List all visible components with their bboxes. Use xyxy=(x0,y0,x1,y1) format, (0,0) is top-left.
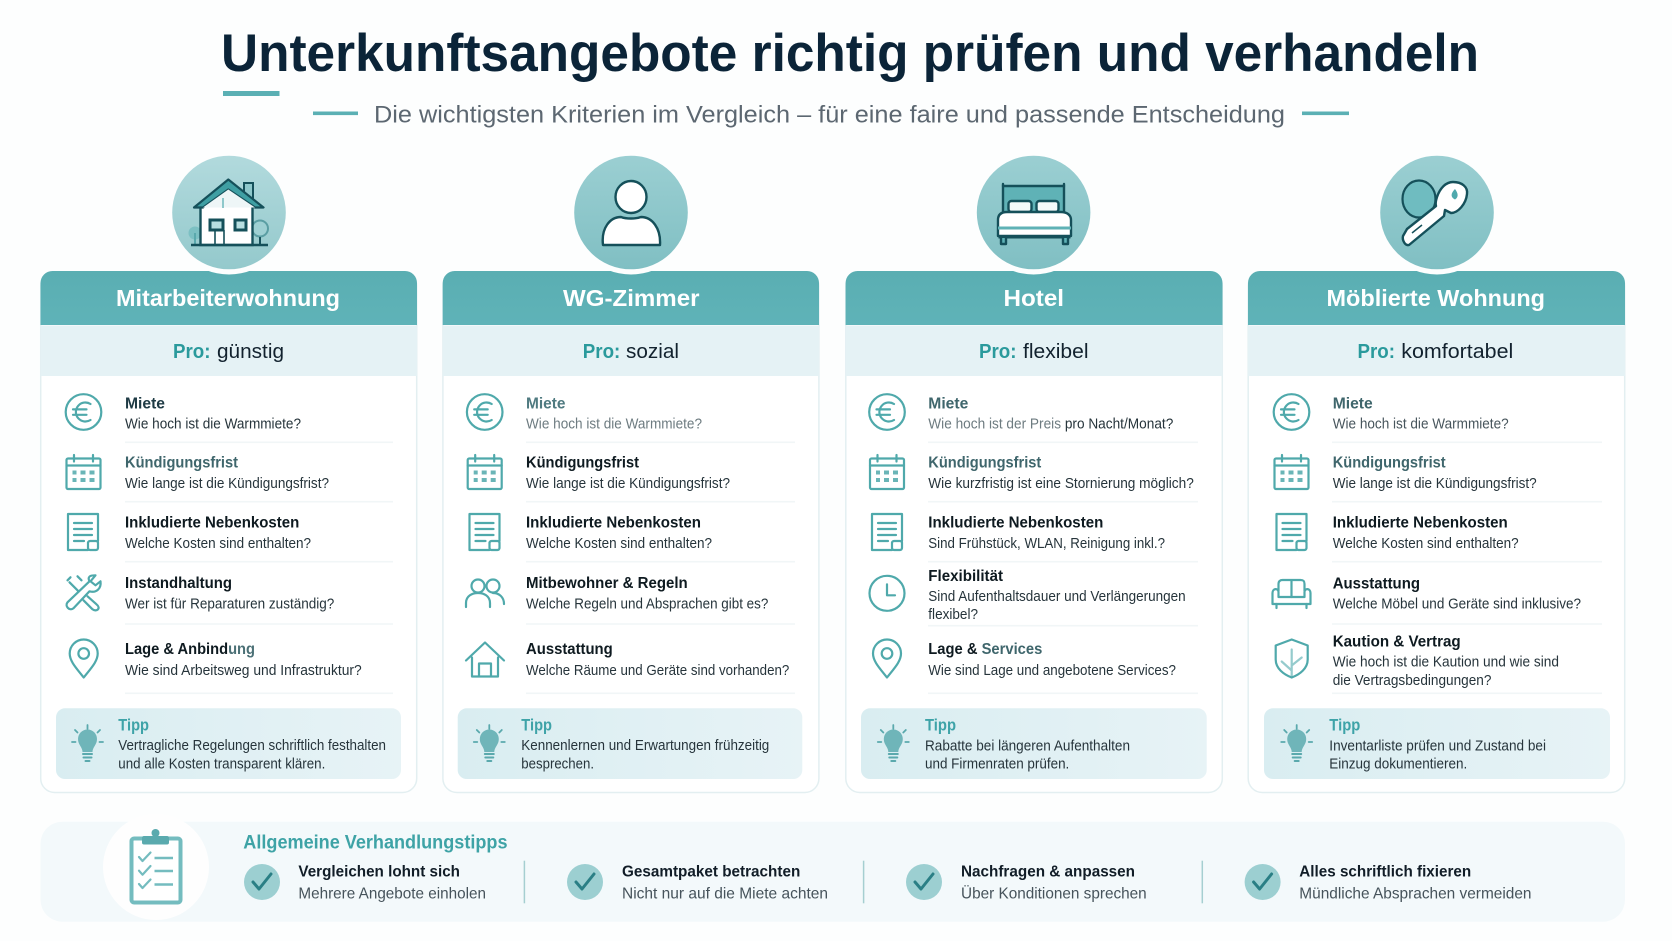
pro band xyxy=(443,326,819,376)
criterion: Kaution & Vertrag xyxy=(1276,634,1559,689)
criterion: Flexibilität: Sind Aufenthaltsdauer und Verlängerungen xyxy=(928,589,1186,605)
criterion: Miete: Wie hoch ist die Warmmiete? xyxy=(125,417,301,433)
criterion: Ausstattung xyxy=(466,641,789,679)
criterion: Instandhaltung: Instandhaltung xyxy=(125,575,232,592)
criterion: Lage & Services xyxy=(873,640,1176,679)
icon: document xyxy=(470,514,500,550)
icon: bulb xyxy=(474,725,505,761)
tip box xyxy=(458,708,802,779)
icon: shield xyxy=(1276,640,1308,678)
header: Mitarbeiterwohnung: Mitarbeiterwohnung xyxy=(116,285,340,311)
pro band: komfortabel xyxy=(1401,341,1513,363)
criterion: Inkludierte Nebenkosten: Inkludierte Nebenkosten xyxy=(526,514,701,531)
icon: bulb xyxy=(1281,725,1312,761)
icon: euro xyxy=(869,394,905,430)
criterion: Kaution & Vertrag: Wie hoch ist die Kaution und wie sind xyxy=(1333,655,1559,671)
title accent bar xyxy=(223,91,280,96)
criterion: Ausstattung: Welche Räume und Geräte sind vorhanden? xyxy=(526,663,789,679)
pro band xyxy=(40,326,417,376)
criterion: Kaution & Vertrag: die Vertragsbedingungen? xyxy=(1333,673,1491,689)
criterion: Flexibilität xyxy=(870,568,1186,623)
pro band: Pro: xyxy=(583,341,620,363)
icon: calendar xyxy=(1274,455,1308,489)
criterion: Kaution & Vertrag: Kaution & Vertrag xyxy=(1333,634,1461,651)
panel: Hotel xyxy=(846,150,1222,792)
tip box: Kennenlernen und Erwartungen frühzeitig xyxy=(521,738,769,754)
panel: general negotiation tips xyxy=(40,814,1625,922)
criterion: Inkludierte Nebenkosten: Welche Kosten sind enthalten? xyxy=(1333,536,1519,552)
icon: house badge xyxy=(167,150,291,274)
tip: Nachfragen: Über Konditionen sprechen xyxy=(961,884,1147,902)
icon: calendar xyxy=(468,455,502,489)
criterion: Inkludierte Nebenkosten xyxy=(470,514,712,552)
criterion: Kündigungsfrist: Kündigungsfrist xyxy=(125,454,239,471)
tip box: Inventarliste prüfen und Zustand bei xyxy=(1329,738,1546,754)
subtitle: Die wichtigsten Kriterien im Vergleich – für eine faire und passende Entscheidung xyxy=(374,102,1285,128)
criterion: Flexibilität: Flexibilität xyxy=(928,568,1004,585)
criterion: Inkludierte Nebenkosten xyxy=(872,514,1165,552)
icon: people xyxy=(466,580,504,607)
tip box: Tipp xyxy=(1329,717,1360,735)
tip: schriftlich: Alles schriftlich fixieren xyxy=(1299,864,1471,881)
criterion: Ausstattung: Welche Möbel und Geräte sind inklusive? xyxy=(1333,597,1581,613)
tip: Nachfragen xyxy=(906,864,1147,902)
tip box: Tipp xyxy=(925,717,956,735)
criterion: Kündigungsfrist xyxy=(66,454,329,492)
criterion: Inkludierte Nebenkosten: Sind Frühstück, WLAN, Reinigung inkl.? xyxy=(928,536,1165,552)
criterion: Lage & Anbindung: Lage & Anbindung xyxy=(125,641,255,658)
criterion: Instandhaltung xyxy=(67,575,334,613)
header: Hotel xyxy=(846,271,1222,325)
header: Mitarbeiterwohnung xyxy=(40,271,417,325)
tip box xyxy=(56,708,401,779)
criterion: Inkludierte Nebenkosten: Inkludierte Nebenkosten xyxy=(928,514,1103,531)
icon: bed badge xyxy=(972,150,1096,274)
tip box: und Firmenraten prüfen. xyxy=(925,756,1069,772)
tip box xyxy=(1264,708,1610,779)
criterion: Kündigungsfrist: Wie lange ist die Kündigungsfrist? xyxy=(526,476,730,492)
criterion: Miete xyxy=(869,394,1173,433)
tip: Gesamtpaket xyxy=(567,864,828,902)
tip: Vergleichen: Vergleichen lohnt sich xyxy=(298,864,460,881)
icon: document xyxy=(68,514,98,550)
heading: general tips: Allgemeine Verhandlungstipps xyxy=(243,831,508,853)
icon: sofa xyxy=(1272,580,1310,608)
criterion: Lage & Anbindung xyxy=(70,640,362,679)
criterion: Miete: Miete xyxy=(1333,395,1373,412)
criterion: Instandhaltung: Wer ist für Reparaturen zuständig? xyxy=(125,597,334,613)
icon: bulb xyxy=(72,725,103,761)
criterion: Miete: Miete xyxy=(526,395,566,412)
criterion: Miete: Miete xyxy=(125,395,165,412)
criterion: Miete: Miete xyxy=(928,395,968,412)
criterion: Kündigungsfrist: Wie kurzfristig ist eine Stornierung möglich? xyxy=(928,476,1194,492)
tip: Gesamtpaket: Gesamtpaket betrachten xyxy=(622,864,800,881)
criterion: Miete: Wie hoch ist der Preis pro Nacht/Monat? xyxy=(928,417,1173,433)
pro band: Pro: xyxy=(1358,341,1395,363)
criterion: Ausstattung: Ausstattung xyxy=(1333,575,1420,592)
tip box: und alle Kosten transparent klären. xyxy=(118,756,325,772)
tip: Gesamtpaket: Nicht nur auf die Miete achten xyxy=(622,885,828,902)
icon: document xyxy=(872,514,902,550)
icon: pin xyxy=(70,640,98,678)
criterion: Inkludierte Nebenkosten: Welche Kosten sind enthalten? xyxy=(526,536,712,552)
tip box xyxy=(861,708,1207,779)
criterion: Inkludierte Nebenkosten xyxy=(1276,514,1519,552)
pro band xyxy=(1248,326,1625,376)
icon: key badge xyxy=(1375,150,1499,274)
pro band: flexibel xyxy=(1023,341,1088,363)
pro band: Pro: xyxy=(979,341,1016,363)
header: Möblierte Wohnung: Möblierte Wohnung xyxy=(1326,285,1545,311)
header: WG-Zimmer: WG-Zimmer xyxy=(563,285,700,311)
criterion: Mitbewohner & Regeln: Welche Regeln und Absprachen gibt es? xyxy=(526,597,768,613)
criterion: Inkludierte Nebenkosten: Welche Kosten sind enthalten? xyxy=(125,536,311,552)
icon: euro xyxy=(467,394,502,430)
tip box: Vertragliche Regelungen schriftlich festhalten xyxy=(118,738,386,754)
tip: Vergleichen xyxy=(244,864,486,902)
criterion: Ausstattung xyxy=(1272,575,1581,613)
tip: schriftlich: Mündliche Absprachen vermeiden xyxy=(1299,885,1532,902)
criterion: Kündigungsfrist xyxy=(870,454,1194,492)
title: Unterkunftsangebote richtig prüfen und verhandeln xyxy=(221,24,1479,83)
tip box: besprechen. xyxy=(521,756,594,772)
criterion: Mitbewohner & Regeln: Mitbewohner & Regeln xyxy=(526,575,688,592)
panel: Mitarbeiterwohnung xyxy=(40,150,417,792)
criterion: Ausstattung: Ausstattung xyxy=(526,641,613,658)
panel: WG-Zimmer xyxy=(443,150,819,792)
criterion: Lage & Services: Lage & Services xyxy=(928,641,1042,658)
criterion: Kündigungsfrist xyxy=(468,454,730,492)
icon: euro xyxy=(66,394,101,430)
criterion: Kündigungsfrist: Kündigungsfrist xyxy=(526,454,640,471)
criterion: Miete: Wie hoch ist die Warmmiete? xyxy=(526,417,702,433)
criterion: Inkludierte Nebenkosten: Inkludierte Nebenkosten xyxy=(125,514,299,531)
icon: person badge xyxy=(569,150,693,274)
criterion: Miete xyxy=(66,394,301,433)
tip: Vergleichen: Mehrere Angebote einholen xyxy=(298,885,486,902)
icon: euro xyxy=(1274,394,1309,430)
criterion: Kündigungsfrist: Kündigungsfrist xyxy=(928,454,1042,471)
icon: calendar xyxy=(870,455,904,489)
icon: bulb xyxy=(878,725,909,761)
header: Hotel: Hotel xyxy=(1004,285,1064,311)
criterion: Kündigungsfrist: Wie lange ist die Kündigungsfrist? xyxy=(125,476,329,492)
pro band: sozial xyxy=(626,341,679,363)
criterion: Kündigungsfrist: Wie lange ist die Kündigungsfrist? xyxy=(1333,476,1537,492)
tip: Nachfragen: Nachfragen & anpassen xyxy=(961,864,1135,881)
tip: schriftlich xyxy=(1245,864,1532,902)
criterion: Mitbewohner & Regeln xyxy=(466,575,768,613)
icon: house outline xyxy=(466,642,504,676)
criterion: Flexibilität: flexibel? xyxy=(928,607,978,623)
tip box: Einzug dokumentieren. xyxy=(1329,756,1467,772)
header: Möblierte Wohnung xyxy=(1248,271,1625,325)
criterion: Lage & Anbindung: Wie sind Arbeitsweg und Infrastruktur? xyxy=(125,663,362,679)
panel: Möblierte Wohnung xyxy=(1248,150,1625,792)
icon: clock xyxy=(870,576,904,611)
icon: document xyxy=(1276,514,1306,550)
criterion: Lage & Services: Wie sind Lage und angebotene Services? xyxy=(928,663,1176,679)
header: WG-Zimmer xyxy=(443,271,819,325)
icon: pin xyxy=(873,640,901,678)
tip box: Tipp xyxy=(118,717,149,735)
criterion: Inkludierte Nebenkosten: Inkludierte Nebenkosten xyxy=(1333,514,1508,531)
tip box: Tipp xyxy=(521,717,552,735)
criterion: Kündigungsfrist: Kündigungsfrist xyxy=(1333,454,1446,471)
criterion: Inkludierte Nebenkosten xyxy=(68,514,311,552)
pro band: günstig xyxy=(217,341,284,363)
criterion: Miete xyxy=(467,394,702,433)
criterion: Miete xyxy=(1274,394,1509,433)
pro band: Pro: xyxy=(173,341,210,363)
pro band xyxy=(846,326,1222,376)
icon: clipboard xyxy=(103,814,209,920)
icon: calendar xyxy=(66,455,100,489)
tip box: Rabatte bei längeren Aufenthalten xyxy=(925,738,1130,754)
criterion: Miete: Wie hoch ist die Warmmiete? xyxy=(1333,417,1509,433)
criterion: Kündigungsfrist xyxy=(1274,454,1537,492)
icon: tools xyxy=(67,575,101,610)
